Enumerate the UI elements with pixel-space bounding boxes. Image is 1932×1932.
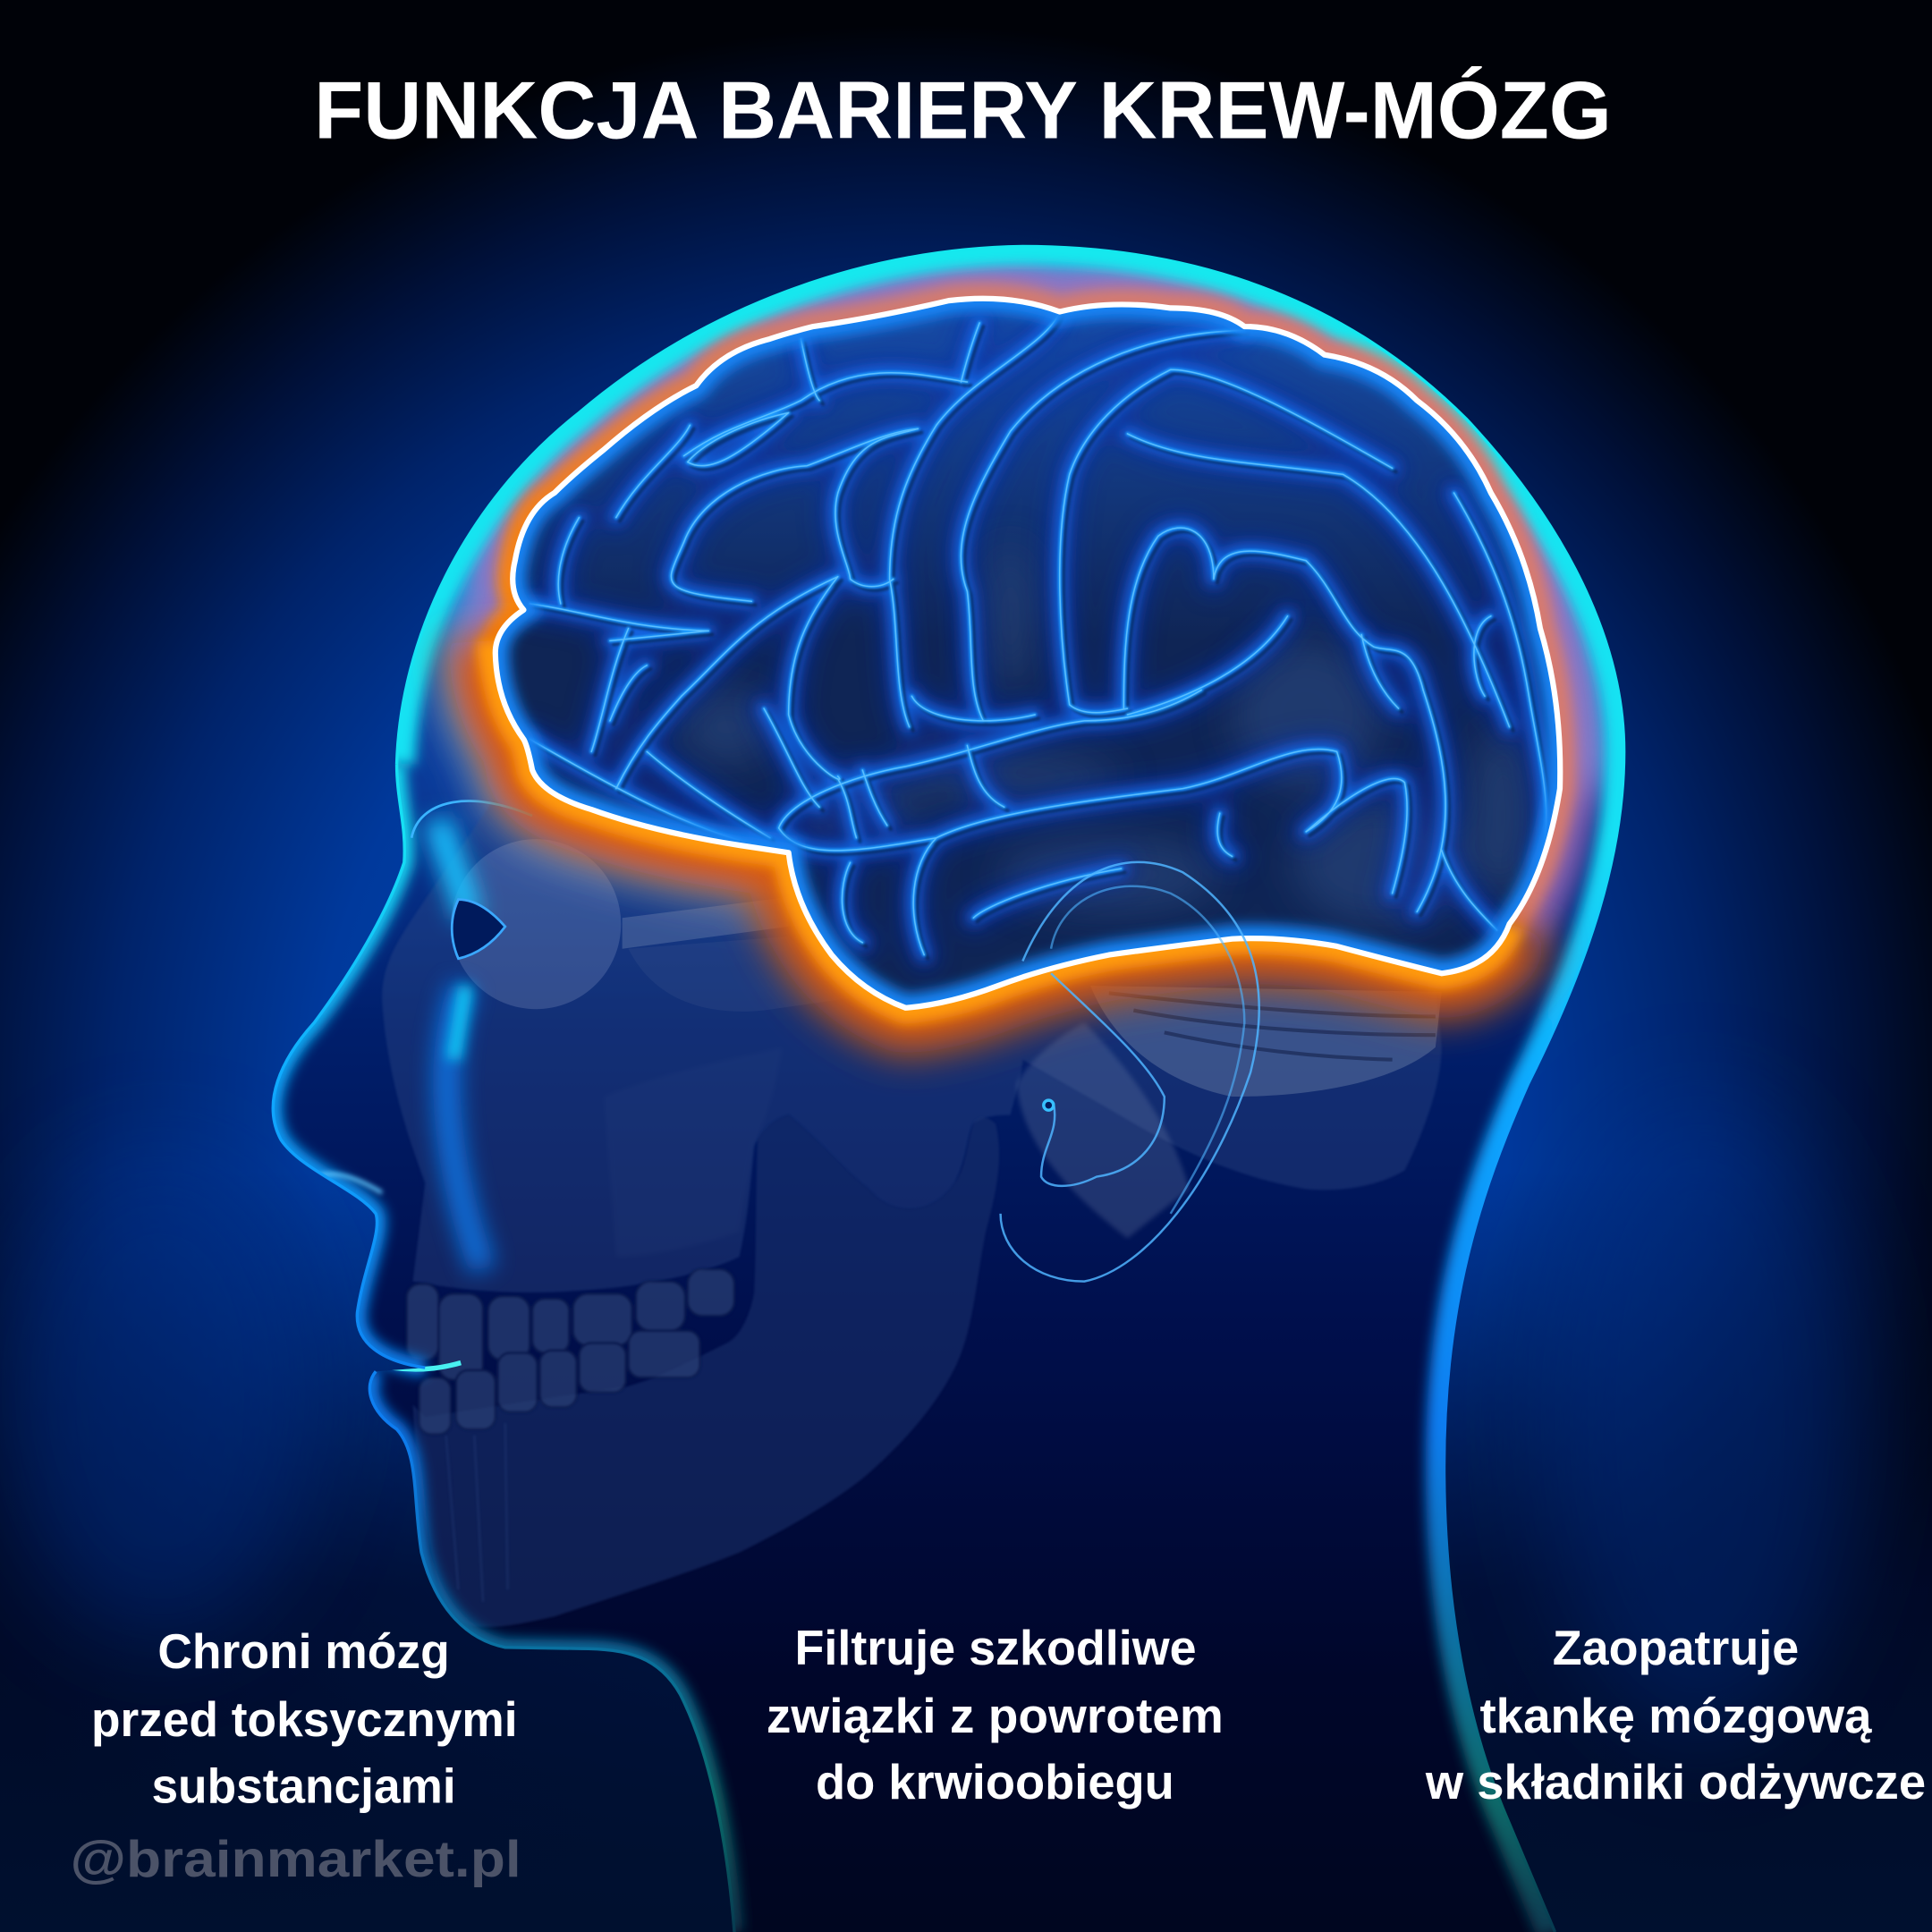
barrier halo purple fade	[496, 299, 1560, 924]
temporal bone	[629, 936, 851, 1012]
head illustration	[272, 245, 1626, 1932]
brain	[480, 284, 1577, 1022]
skull top blue haze	[496, 299, 1560, 852]
lower jaw	[412, 1115, 999, 1627]
skull face bone	[382, 801, 1442, 1292]
chin bone lines	[446, 1423, 508, 1602]
watermark: @brainmarket.pl	[71, 1831, 521, 1888]
cheekbone panel	[604, 1047, 783, 1257]
face glow	[310, 801, 532, 1369]
title: FUNKCJA BARIERY KREW-MÓZG	[314, 65, 1612, 156]
head interior	[275, 248, 1623, 1932]
caption: nutrients	[1425, 1620, 1926, 1809]
caption: filtering	[767, 1620, 1224, 1809]
caption: filtering: Filtruje szkodliwe	[795, 1620, 1197, 1675]
caption: protection: substancjami	[151, 1758, 456, 1813]
ear	[1001, 862, 1259, 1282]
eyeball	[451, 839, 621, 1009]
caption: filtering: związki z powrotem	[767, 1688, 1224, 1743]
caption: nutrients: w składniki odżywcze	[1425, 1754, 1926, 1809]
eye almond	[452, 900, 505, 959]
optic nerve	[623, 902, 778, 949]
brain stem and inner ear bones	[1016, 1022, 1189, 1238]
caption: protection	[91, 1623, 518, 1813]
caption: filtering: do krwioobiegu	[816, 1754, 1174, 1809]
back of head inner glow	[397, 247, 1624, 1932]
teeth	[407, 1269, 734, 1434]
caption: nutrients: Zaopatruje	[1553, 1620, 1799, 1675]
caption: protection: przed toksycznymi	[91, 1691, 518, 1747]
barrier halo	[493, 299, 1560, 1008]
head outline	[273, 247, 1624, 1932]
front of face inner glow	[273, 764, 734, 1932]
cerebellum	[1090, 986, 1442, 1097]
brain outline	[496, 299, 1560, 1008]
caption: protection: Chroni mózg	[157, 1623, 450, 1679]
caption: nutrients: tkankę mózgową	[1479, 1688, 1872, 1743]
